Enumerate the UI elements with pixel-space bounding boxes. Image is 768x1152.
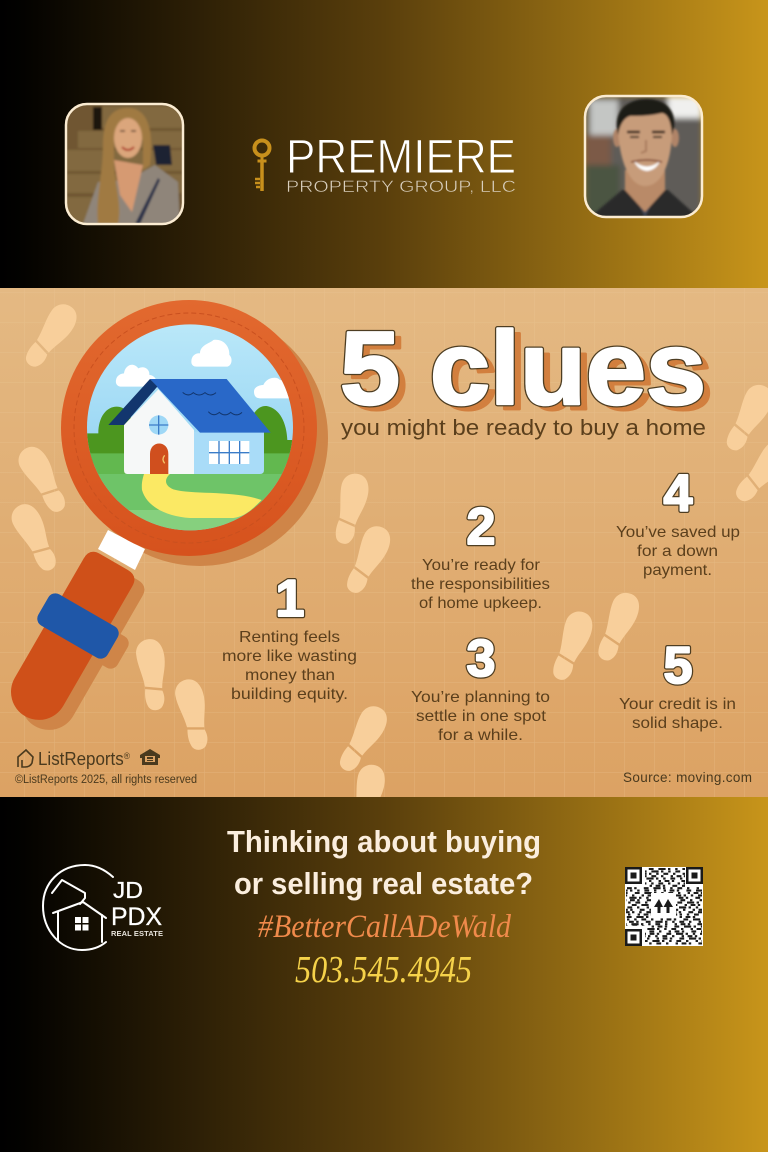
icon: ListReports house [18,750,33,767]
QR finder squares [625,867,703,946]
icon: gold key [254,140,270,191]
magnifying glass [1,300,328,740]
hills [83,406,297,463]
icon: house in circle [43,865,113,950]
magnifier ring [61,300,317,556]
title: 5 clues [340,311,706,427]
clouds [116,340,290,398]
JD PDX logo: REAL ESTATE [111,929,163,938]
clue 2 [411,498,550,612]
clue 1: 1 [276,570,304,628]
clue 3: settle in one spot [416,708,547,725]
photo frame: man [585,96,702,217]
icon: equal housing [140,749,160,765]
clue 4: for a down [637,543,718,560]
clue 1: Renting feels [239,629,340,646]
ListReports logo: ® [124,751,130,761]
clue 5: solid shape. [632,715,723,732]
call to action heading [227,824,541,901]
clue 3: 3 [467,630,495,688]
roof [150,379,271,433]
panel: infographic [0,288,768,838]
clue 2: the responsibilities [411,576,550,593]
QR code [625,867,703,946]
footprints trail [7,299,768,838]
clue 1: 1 [276,570,304,628]
source: Source: moving.com [623,770,752,785]
logo: Premiere Property Group: PROPERTY GROUP, LLC [286,177,516,196]
door [150,443,168,474]
subtitle: you might be ready to buy a home [341,415,706,440]
clue 4: You’ve saved up [616,524,740,541]
copyright: ©ListReports 2025, all rights reserved [15,774,197,786]
clue 3 [411,630,550,744]
clue 1: building equity. [231,686,348,703]
JD PDX logo: PDX [111,903,162,931]
QR center logo [651,893,676,918]
clue 1 [222,570,357,703]
clue 5: 5 [664,637,692,695]
clue 2: of home upkeep. [419,595,542,612]
ListReports logo [18,749,160,769]
magnifier neck [98,530,145,570]
clue 4: payment. [643,562,712,579]
clue 1: more like wasting [222,648,357,665]
clue 5: 5 [664,637,692,695]
hashtag: #BetterCallADeWald [258,909,511,945]
ListReports logo: ListReports [38,749,129,769]
magnifier handle [1,548,138,730]
call to action heading: Thinking about buying [227,824,541,859]
window [209,441,249,464]
clue 5 [619,637,736,732]
clue 5: Your credit is in [619,696,736,713]
photo: woman agent [66,104,183,224]
clue 2: 2 [467,498,495,556]
phone number: 503.545.4945 [295,949,472,991]
yellow path [142,474,262,518]
clue 3: for a while. [438,727,523,744]
clue 4: 4 [664,465,693,523]
house body [194,432,264,474]
magnifier band [34,590,122,662]
title: 5 clues [340,311,706,427]
clue 2: You’re ready for [422,557,541,574]
photo: man agent [585,96,702,217]
lens scene: house [83,323,297,533]
icon: window [75,917,88,930]
magnifier shadow [11,310,328,740]
JD PDX logo: JD [113,877,143,903]
JD PDX logo [43,865,163,950]
clue 3: 3 [467,630,495,688]
clue 3: You’re planning to [411,689,550,706]
round window [149,415,168,435]
logo: Premiere Property Group: PREMIERE [286,131,516,184]
call to action heading: or selling real estate? [234,866,533,901]
clue 4 [616,465,740,579]
clue 1: money than [245,667,335,684]
photo frame: woman [66,104,183,224]
clue 4: 4 [664,465,693,523]
clue 2: 2 [467,498,495,556]
title: 5 clues [347,316,713,432]
